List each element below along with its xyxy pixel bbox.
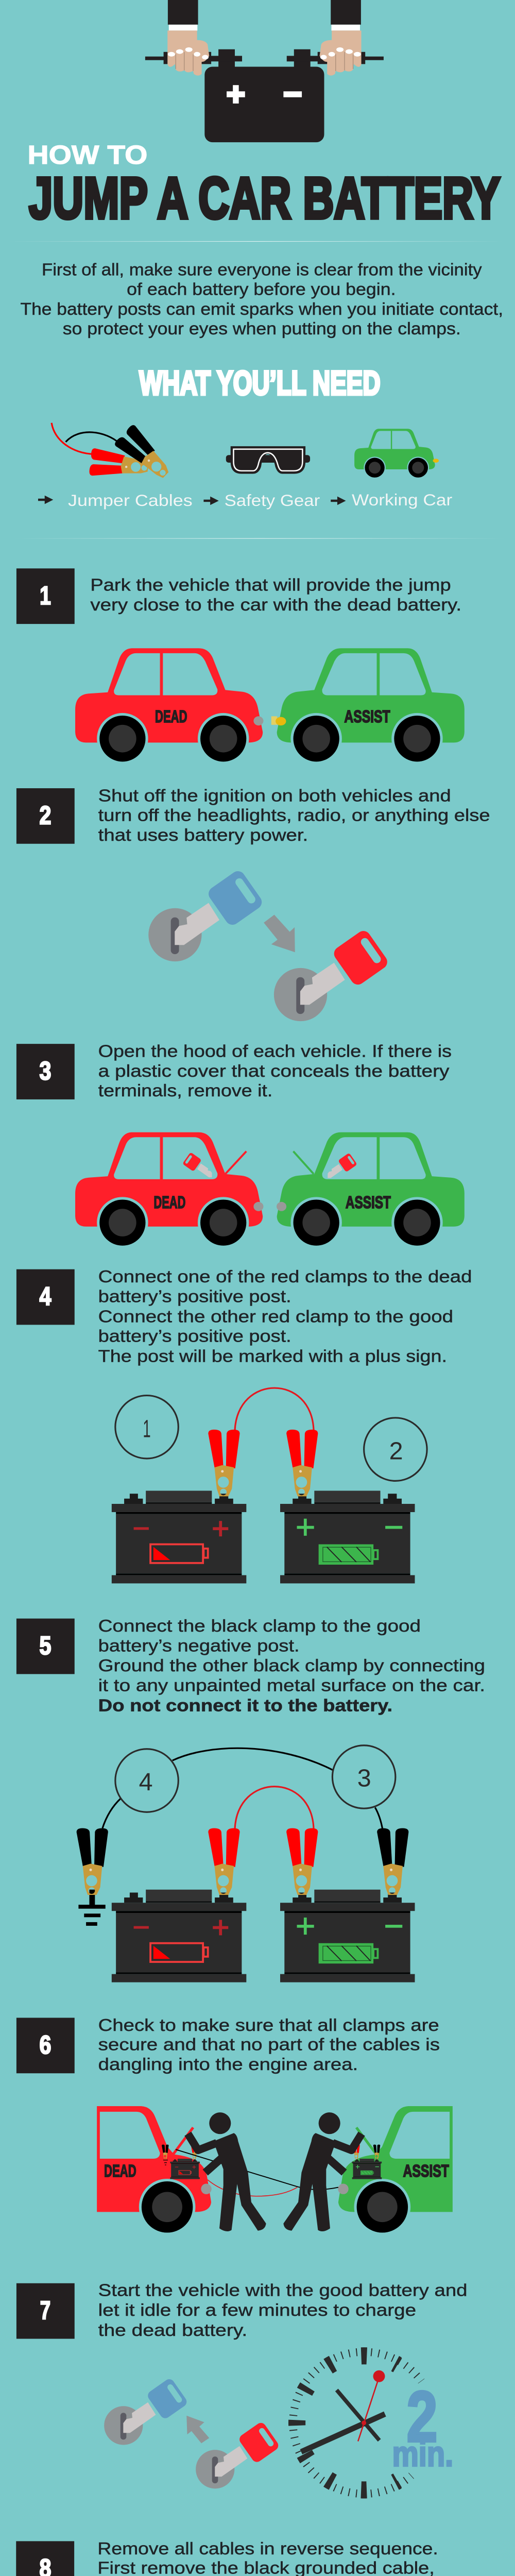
circle 1: 1 bbox=[143, 1415, 151, 1443]
step 3 text: terminals, remove it. bbox=[98, 1081, 272, 1100]
circle 3: 3 bbox=[357, 1764, 371, 1792]
step 7 text: the dead battery. bbox=[98, 2321, 247, 2340]
step 6 number: 6 bbox=[40, 2030, 51, 2059]
step 8 text: Remove all cables in reverse sequence. bbox=[97, 2539, 438, 2558]
panel: step 6 illustration and step 7 bbox=[16, 2106, 492, 2576]
illustration: cars with open hoods: ASSIST bbox=[346, 1193, 391, 1212]
step 6 text: Check to make sure that all clamps are bbox=[98, 2016, 439, 2035]
step 6 text: dangling into the engine area. bbox=[98, 2055, 358, 2074]
step 4 text: The post will be marked with a plus sign. bbox=[98, 1347, 447, 1366]
illustration: keys turned on bbox=[104, 2377, 280, 2488]
illustration: two people checking clamps: DEAD bbox=[104, 2162, 136, 2181]
step 6 text bbox=[98, 2016, 440, 2074]
step 6 text: secure and that no part of the cables is bbox=[98, 2036, 440, 2055]
step 3 number: 3 bbox=[40, 1057, 51, 1086]
item list: Safety Gear bbox=[225, 491, 320, 510]
circle 3 bbox=[332, 1745, 396, 1808]
step 1 number bbox=[16, 568, 75, 624]
title: how to: HOW TO bbox=[28, 140, 147, 170]
step 4 text: Connect the other red clamp to the good bbox=[98, 1307, 453, 1326]
illustration: cars with open hoods bbox=[75, 1132, 465, 1248]
step 8 text bbox=[97, 2539, 492, 2576]
step 3 text: Open the hood of each vehicle. If there is bbox=[98, 1042, 452, 1061]
clock: 2 min bbox=[293, 2352, 421, 2494]
step 3 text bbox=[98, 1042, 452, 1100]
illustration: two cars parked close: DEAD bbox=[155, 707, 187, 726]
circle 4: 4 bbox=[139, 1768, 153, 1796]
intro text: of each battery before you begin. bbox=[127, 280, 396, 299]
step 4 number bbox=[16, 1269, 75, 1325]
intro text: The battery posts can emit sparks when you initiate contact, bbox=[21, 300, 503, 319]
illustration: two cars parked close: ASSIST bbox=[344, 707, 390, 726]
item list: Working Car bbox=[352, 490, 453, 509]
intro text: First of all, make sure everyone is clear from the vicinity bbox=[42, 260, 482, 279]
step 5 text: Ground the other black clamp by connecting bbox=[98, 1656, 485, 1675]
label: 2 min: min. bbox=[392, 2434, 453, 2473]
panel: steps 1 and 2 bbox=[13, 538, 506, 1021]
panel: steps 3 and 4 bbox=[16, 1042, 472, 1583]
circle 2 bbox=[364, 1418, 427, 1481]
illustration: cars with open hoods: DEAD bbox=[153, 1193, 185, 1212]
good battery bbox=[280, 1491, 415, 1583]
intro text bbox=[21, 260, 503, 338]
panel: step 5 bbox=[16, 1617, 485, 2074]
step 5 text bbox=[98, 1617, 485, 1715]
dead battery bbox=[112, 1890, 246, 1982]
illustration: keys turned off bbox=[148, 868, 390, 1021]
label: 2 min bbox=[392, 2377, 453, 2473]
step 3 text: a plastic cover that conceals the battery bbox=[98, 1062, 450, 1081]
step 2 text: turn off the headlights, radio, or anything else bbox=[98, 806, 490, 825]
step 5 text: it to any unpainted metal surface on the car. bbox=[98, 1676, 485, 1696]
step 4 number: 4 bbox=[40, 1282, 52, 1311]
heading: what you'll need: WHAT YOU’LL NEED bbox=[139, 364, 381, 402]
step 7 text: Start the vehicle with the good battery and bbox=[98, 2281, 468, 2300]
step 7 text bbox=[98, 2281, 468, 2340]
step 7 number: 7 bbox=[40, 2296, 50, 2325]
intro text: so protect your eyes when putting on the clamps. bbox=[63, 319, 461, 338]
illustration: hands holding battery bbox=[145, 0, 384, 142]
illustration: two people checking clamps: ASSIST bbox=[403, 2162, 449, 2181]
step 6 number bbox=[16, 2018, 75, 2073]
step 2 text: that uses battery power. bbox=[98, 826, 308, 845]
step 2 text: Shut off the ignition on both vehicles and bbox=[98, 786, 451, 805]
step 1 text bbox=[90, 576, 461, 615]
step 5 number bbox=[16, 1619, 75, 1674]
diagram: full cable connections bbox=[77, 1745, 415, 1982]
step 1 text: Park the vehicle that will provide the jump bbox=[90, 576, 451, 595]
step 8 number bbox=[16, 2541, 74, 2576]
dead battery bbox=[112, 1491, 246, 1583]
icon: jumper cables bbox=[52, 423, 176, 485]
step 4 text bbox=[98, 1267, 472, 1366]
icon: working car bbox=[354, 429, 439, 479]
illustration: two people checking clamps bbox=[97, 2106, 453, 2235]
item list bbox=[38, 490, 453, 510]
step 2 number bbox=[16, 788, 75, 844]
circle 4 bbox=[115, 1749, 178, 1812]
step 7 number bbox=[16, 2283, 75, 2339]
step 1 number: 1 bbox=[40, 581, 51, 610]
step 5 text: battery’s negative post. bbox=[98, 1636, 300, 1655]
step 5 text: Connect the black clamp to the good bbox=[98, 1617, 421, 1636]
header section bbox=[7, 0, 506, 510]
circle 2: 2 bbox=[389, 1437, 403, 1465]
good battery bbox=[280, 1890, 415, 1982]
diagram: red clamps on positive posts bbox=[112, 1388, 427, 1583]
illustration: two cars parked close bbox=[75, 648, 465, 764]
step 5 number: 5 bbox=[40, 1631, 51, 1660]
step 4 text: battery’s positive post. bbox=[98, 1287, 291, 1306]
step 1 text: very close to the car with the dead battery. bbox=[90, 596, 461, 615]
ground symbol bbox=[78, 1890, 106, 1926]
item list: Jumper Cables bbox=[68, 491, 193, 510]
step 4 text: Connect one of the red clamps to the dead bbox=[98, 1267, 472, 1286]
step 3 number bbox=[16, 1044, 75, 1099]
step 2 number: 2 bbox=[40, 801, 51, 829]
step 5 text: Do not connect it to the battery. bbox=[98, 1696, 392, 1715]
step 4 text: battery’s positive post. bbox=[98, 1327, 291, 1346]
circle 1 bbox=[115, 1396, 178, 1459]
step 7 text: let it idle for a few minutes to charge bbox=[98, 2301, 416, 2320]
label: 2 min: 2 bbox=[407, 2377, 437, 2457]
icon: safety goggles bbox=[226, 446, 310, 474]
step 2 text bbox=[98, 786, 490, 845]
